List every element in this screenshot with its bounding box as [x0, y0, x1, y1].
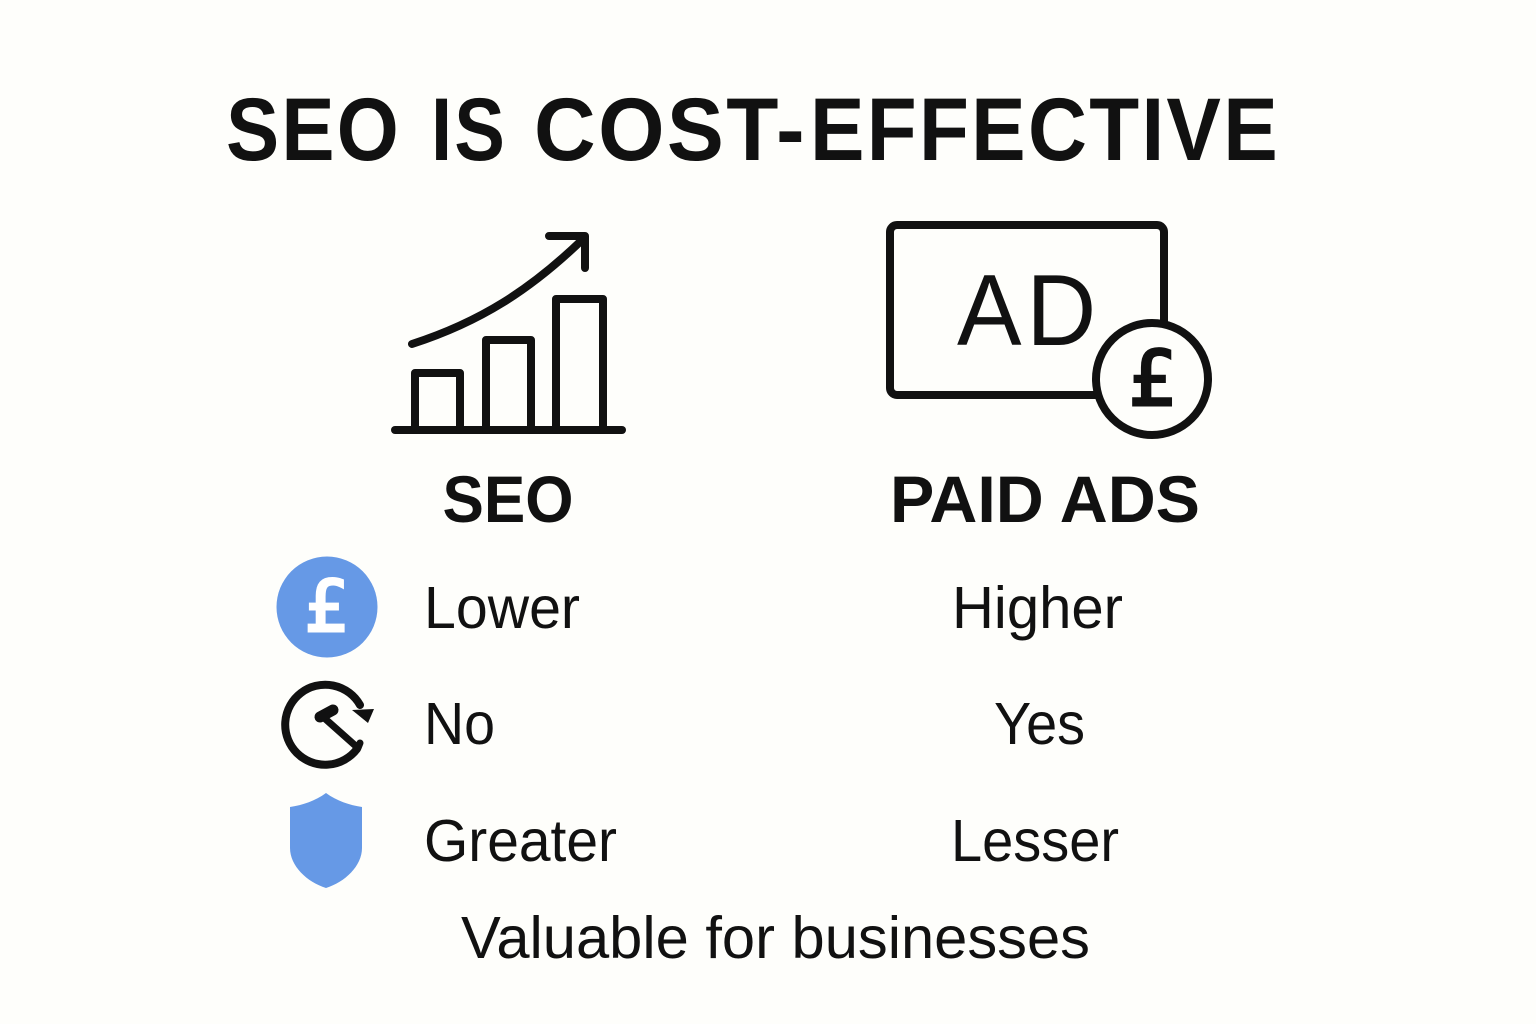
title: SEO — [226, 79, 401, 179]
text: SEO trust: Greater — [424, 808, 617, 874]
footer text: Valuable for businesses — [461, 905, 1090, 971]
text: paid ads ongoing payment: Yes — [994, 691, 1085, 757]
icon: blue pound coin: £ — [305, 566, 349, 648]
title: IS — [431, 79, 507, 179]
text: paid ads trust: Lesser — [951, 808, 1119, 874]
title: COST- — [534, 79, 807, 179]
heading: SEO: SEO — [442, 462, 574, 536]
icon: blue shield — [290, 793, 362, 888]
icon: paid ad with pound coin: £ — [1129, 334, 1177, 423]
text: SEO ongoing payment: No — [424, 691, 495, 757]
icon: paid ad with pound coin — [890, 225, 1208, 435]
heading: PAID ADS: PAID ADS — [890, 462, 1200, 536]
icon: blue pound coin — [276, 556, 378, 658]
text: paid ads cost: Higher — [952, 575, 1123, 641]
title — [226, 79, 1280, 179]
icon: paid ad with pound coin: AD — [957, 255, 1101, 367]
text: SEO cost: Lower — [424, 575, 580, 641]
icon: clock with refresh arrow — [285, 685, 374, 765]
icon: SEO growth chart — [395, 236, 622, 430]
title: EFFECTIVE — [810, 79, 1280, 179]
